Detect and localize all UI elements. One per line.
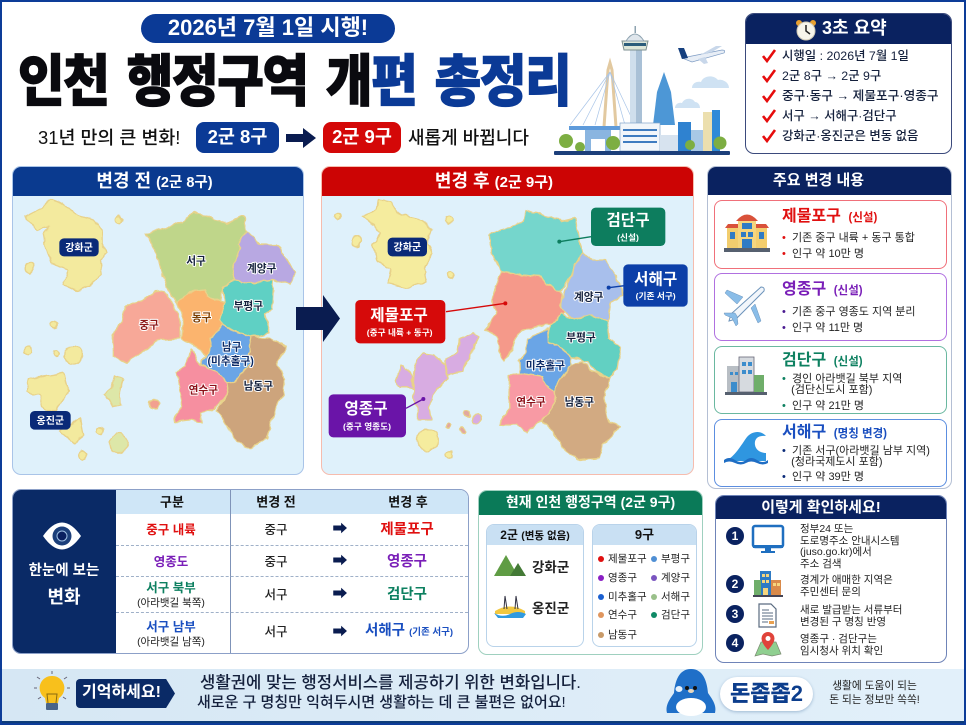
- card title: 제물포구 (신설): [782, 208, 877, 225]
- sub-panel: counties: [486, 524, 584, 647]
- step text: 정부24 또는: [800, 523, 853, 535]
- Namdong-gu: [217, 337, 287, 448]
- Dong-gu: [177, 290, 225, 356]
- callout: Seohae: [623, 264, 688, 307]
- date pill: 2026년 7월 1일 시행!: [168, 15, 368, 40]
- row: Jung-gu inland: 중구 내륙: [146, 523, 196, 537]
- Ganghwa label: 강화군: [532, 560, 569, 575]
- Seo-gu: [147, 212, 247, 303]
- brand tagline: 돈 되는 정보만 쏙쏙!: [829, 694, 920, 706]
- callout: Geomdan: [591, 208, 665, 246]
- map labels: 남동구: [244, 379, 273, 392]
- row: Jung-gu inland: ➡: [332, 520, 348, 538]
- callout: Yeongjong: 영종구: [344, 400, 388, 418]
- number badge: 2: [732, 577, 738, 591]
- card: Jemulpo: [714, 200, 947, 269]
- brand tagline: [822, 679, 927, 707]
- bullets: • 인구 약 39만 명: [782, 471, 864, 483]
- map labels: 계양구: [247, 262, 277, 275]
- summary checklist: 강화군·옹진군은 변동 없음: [782, 129, 918, 143]
- icon: monitor: [752, 524, 784, 553]
- bullets: [782, 306, 916, 334]
- bullets: • 기존 서구(아라뱃길 남부 지역): [782, 445, 930, 457]
- leader dots: [421, 240, 611, 401]
- table side label: [13, 490, 116, 655]
- row: Seo-gu south: 서구 남부: [146, 620, 196, 634]
- county tags: 강화군: [65, 241, 93, 254]
- panel: after map: [321, 166, 694, 475]
- icon: light bulb: [34, 671, 70, 710]
- current districts heading: 현재 인천 행정구역 (2군 9구): [506, 494, 675, 510]
- card title: 영종구 (신설): [782, 281, 863, 298]
- illustration: Incheon skyline: [554, 26, 730, 155]
- summary checklist: [762, 49, 939, 144]
- subtitle lead text: 31년 만의 큰 변화!: [38, 127, 180, 148]
- how-to heading: [716, 496, 946, 519]
- card title: 서해구 (명칭 변경): [782, 424, 887, 441]
- summary checklist: 중구·동구 → 제물포구·영종구: [782, 89, 939, 103]
- panel: 3-second summary: [745, 13, 952, 154]
- number badge: [726, 527, 744, 545]
- map labels: [139, 255, 277, 397]
- summary heading: [746, 14, 951, 44]
- table heading: before: 변경 전: [256, 494, 296, 510]
- brand tagline: 생활에 도움이 되는: [832, 680, 917, 692]
- remember tag: [76, 679, 175, 708]
- plane: [678, 46, 725, 64]
- Jung-gu: [113, 291, 180, 363]
- callout: Geomdan: 검단구: [606, 212, 650, 230]
- step text: 영종구 · 검단구는: [800, 633, 877, 645]
- step 3: [726, 603, 902, 628]
- card: Yeongjong: [714, 273, 947, 341]
- brand pill: 돈좁좁2: [730, 681, 803, 706]
- small islands: [335, 214, 455, 458]
- number badge: [726, 575, 744, 593]
- icon: airplane: [724, 286, 765, 326]
- district list: [598, 553, 690, 641]
- leader lines: [406, 237, 624, 408]
- bullets: • 인구 약 21만 명: [782, 400, 864, 412]
- number badge: [726, 605, 744, 623]
- panel: before map: [12, 166, 304, 475]
- subtitle tail text: 새롭게 바뀝니다: [408, 128, 529, 148]
- step text: 경계가 애매한 지역은: [800, 574, 893, 586]
- pill: after count: 2군 9구: [332, 126, 392, 147]
- footer message: [197, 673, 581, 711]
- tower: [622, 26, 648, 126]
- bullets: • 인구 약 11만 명: [782, 322, 863, 334]
- row: Seo-gu south: (아라뱃길 남쪽): [137, 636, 205, 648]
- Bupyeong-gu: [220, 280, 273, 337]
- table heading: after: 변경 후: [388, 494, 428, 510]
- pill: before count: [196, 122, 279, 153]
- panel: comparison table: [12, 489, 469, 654]
- county tags: 옹진군: [37, 415, 64, 427]
- Yeonsu-gu: [175, 350, 228, 423]
- district list: 영종구: [608, 572, 637, 584]
- summary heading: 3초 요약: [822, 18, 887, 38]
- step text: 임시청사 위치 확인: [800, 645, 883, 657]
- column divider: [230, 490, 231, 653]
- district list: 연수구: [608, 609, 637, 621]
- row: Jung-gu inland: 제물포구: [380, 522, 434, 538]
- arrow: [286, 128, 316, 148]
- map labels: 동구: [192, 312, 212, 324]
- remember tag: 기억하세요!: [82, 684, 161, 701]
- icon: wave: [724, 432, 768, 464]
- Bupyeong-gu: [548, 313, 621, 378]
- map labels: 계양구: [574, 290, 604, 303]
- step text: 도로명주소 안내시스템: [800, 535, 900, 547]
- icon: map pin: [754, 632, 782, 656]
- callout: Geomdan: (신설): [617, 231, 639, 242]
- after heading: 변경 후 (2군 9구): [435, 171, 553, 191]
- Yeonsu-gu: [499, 373, 555, 433]
- table header: [116, 490, 468, 514]
- step 1: [726, 523, 900, 570]
- map labels: (미추홀구): [208, 355, 254, 368]
- Ganghwa tag: [388, 238, 427, 256]
- buildings: [620, 110, 720, 151]
- step text: 주소 검색: [800, 558, 842, 570]
- district list: 부평구: [661, 553, 690, 565]
- callout: Seohae: (기존 서구): [636, 290, 676, 301]
- icon: city hall: [724, 214, 770, 252]
- Jemulpo-gu: [486, 272, 564, 362]
- map labels: 부평구: [234, 300, 263, 312]
- after heading: [322, 167, 693, 196]
- district list: 검단구: [661, 609, 690, 621]
- step text: [800, 574, 893, 598]
- map labels: 서구: [186, 255, 206, 268]
- icon: office buildings: [725, 356, 767, 395]
- panel: how to check: [715, 495, 947, 663]
- row: Yeongjong island: 영종도: [154, 555, 188, 569]
- row: Seo-gu south: 서구: [264, 625, 288, 639]
- district list: 제물포구: [608, 553, 647, 565]
- number badge: 1: [732, 529, 738, 543]
- counties heading: [487, 525, 583, 545]
- number badge: 4: [732, 636, 738, 650]
- row: Seo-gu north: ➡: [332, 586, 348, 602]
- trees: [559, 134, 726, 152]
- callout: Yeongjong: (중구 영종도): [343, 420, 391, 431]
- mascot: penguin: [665, 669, 717, 716]
- bullets: (청라국제도시 포함): [791, 456, 883, 468]
- step text: [800, 604, 902, 628]
- brand pill: [720, 677, 813, 711]
- step text: 변경된 구 명칭 반영: [800, 616, 886, 628]
- icon: eye: [43, 522, 81, 550]
- ground line: [554, 151, 730, 155]
- Nam-gu: [200, 324, 253, 383]
- main changes heading: [708, 167, 951, 195]
- map labels: 중구: [139, 320, 159, 332]
- before map: [23, 198, 296, 461]
- map labels: 연수구: [516, 396, 546, 409]
- icon: document: [758, 603, 777, 628]
- step text: 주민센터 문의: [800, 586, 861, 598]
- map labels: 남동구: [565, 396, 594, 409]
- Ongjin label: 옹진군: [532, 601, 569, 616]
- panel: main changes: [707, 166, 952, 489]
- before heading: [13, 167, 303, 196]
- step text: (juso.go.kr)에서: [800, 546, 872, 558]
- bullets: [782, 372, 902, 412]
- before heading: 변경 전 (2군 8구): [96, 171, 213, 191]
- side emphasis: 변화: [47, 587, 81, 607]
- how-to heading: 이렇게 확인하세요!: [761, 499, 881, 516]
- district list: 미추홀구: [608, 591, 647, 603]
- card title: 검단구 (신설): [782, 352, 863, 369]
- step 4: [726, 632, 883, 657]
- row: Seo-gu north: 검단구: [387, 587, 427, 603]
- row: Seo-gu south: [137, 620, 453, 648]
- counties heading: 2군 (변동 없음): [500, 528, 570, 542]
- footer message: 생활권에 맞는 행정서비스를 제공하기 위한 변화입니다.: [200, 673, 581, 692]
- title: 인천 행정구역 개편 총정리: [18, 50, 570, 113]
- districts heading: 9구: [635, 527, 654, 542]
- pill: after count: [323, 122, 401, 153]
- county tags: [30, 238, 99, 430]
- icon: buildings: [753, 571, 783, 597]
- panel: current districts: [478, 490, 703, 655]
- Yeongjong-gu: [396, 333, 481, 424]
- map labels: 연수구: [189, 384, 218, 397]
- row: Seo-gu north: (아라뱃길 북쪽): [137, 597, 205, 609]
- number badge: 3: [732, 607, 738, 621]
- clouds: [675, 76, 729, 108]
- current districts heading: [479, 491, 702, 515]
- bullets: • 기존 중구 내륙 + 동구 통합: [782, 232, 915, 244]
- sub-panel: districts: [592, 524, 697, 647]
- footer message: 새로운 구 명칭만 익혀두시면 생활하는 데 큰 불편은 없어요!: [197, 694, 566, 711]
- small islands: [24, 217, 122, 460]
- card: Geomdan: [714, 346, 947, 414]
- Ganghwa tag: 강화군: [394, 241, 421, 254]
- step text: [800, 523, 900, 570]
- Michuhol-gu: [519, 329, 571, 392]
- bridge: [569, 63, 635, 151]
- districts heading: [593, 525, 696, 545]
- bullets: [782, 232, 915, 260]
- bullets: • 경인 아라뱃길 북부 지역: [782, 373, 902, 385]
- callout: Yeongjong: [329, 394, 406, 437]
- callout: Jemulpo: 제물포구: [370, 307, 428, 325]
- after map: [328, 198, 688, 462]
- number badge: [726, 634, 744, 652]
- step text: [800, 633, 883, 657]
- step 2: [726, 571, 893, 598]
- Namdong-gu: [543, 362, 619, 460]
- Ganghwa island: [25, 199, 107, 290]
- table heading: category: 구분: [160, 494, 184, 510]
- callout: Jemulpo: (중구 내륙 + 동구): [367, 327, 433, 338]
- row: Seo-gu north: [116, 577, 468, 613]
- callout: Jemulpo: [355, 300, 445, 343]
- Geomdan-gu: [489, 210, 583, 292]
- bullets: • 인구 약 10만 명: [782, 248, 864, 260]
- icon: island: [494, 596, 526, 618]
- callout: Seohae: 서해구: [634, 270, 677, 288]
- Gyeyang-gu: [233, 232, 295, 287]
- icon: alarm clock: [796, 20, 816, 40]
- summary checklist: 2군 8구 → 2군 9구: [782, 69, 881, 83]
- subtitle row: [38, 122, 529, 153]
- bullets: • 기존 중구 영종도 지역 분리: [782, 306, 916, 318]
- icon: mountains: [494, 555, 526, 576]
- pill: before count: 2군 8구: [208, 126, 267, 147]
- map labels: [516, 290, 604, 409]
- map labels: 미추홀구: [526, 359, 565, 372]
- row: Seo-gu north: 서구: [264, 588, 288, 602]
- row: Yeongjong island: 영종구: [387, 554, 427, 570]
- row: Yeongjong island: ➡: [332, 552, 348, 570]
- Ganghwa island: [363, 200, 433, 288]
- row: Jung-gu inland: [116, 514, 468, 546]
- map labels: 부평구: [566, 332, 596, 344]
- map labels: 남구: [222, 340, 242, 353]
- row: Seo-gu north: 서구 북부: [146, 581, 196, 595]
- row: Jung-gu inland: 중구: [264, 523, 288, 537]
- Seohae area: [561, 252, 623, 322]
- main changes heading: 주요 변경 내용: [773, 172, 864, 189]
- side text: 한눈에 보는: [29, 563, 99, 579]
- summary checklist: 시행일 : 2026년 7월 1일: [782, 49, 909, 63]
- row: Yeongjong island: [116, 546, 468, 577]
- bullets: [782, 444, 930, 483]
- row: Yeongjong island: 중구: [264, 555, 288, 569]
- district list: 계양구: [661, 572, 690, 584]
- summary checklist: 서구 → 서해구·검단구: [782, 109, 897, 123]
- row: Seo-gu south: 서해구 (기존 서구): [365, 623, 453, 639]
- card: Seohae: [714, 419, 947, 487]
- step text: 새로 발급받는 서류부터: [800, 604, 902, 616]
- twisted tower: [653, 72, 675, 125]
- row: Seo-gu south: ➡: [332, 624, 348, 640]
- district list: 서해구: [661, 591, 690, 603]
- footer banner: [2, 669, 964, 723]
- district list: 남동구: [608, 629, 637, 641]
- arrow: before to after: [296, 295, 340, 342]
- bullets: (검단신도시 포함): [791, 384, 872, 396]
- date pill: [141, 14, 395, 43]
